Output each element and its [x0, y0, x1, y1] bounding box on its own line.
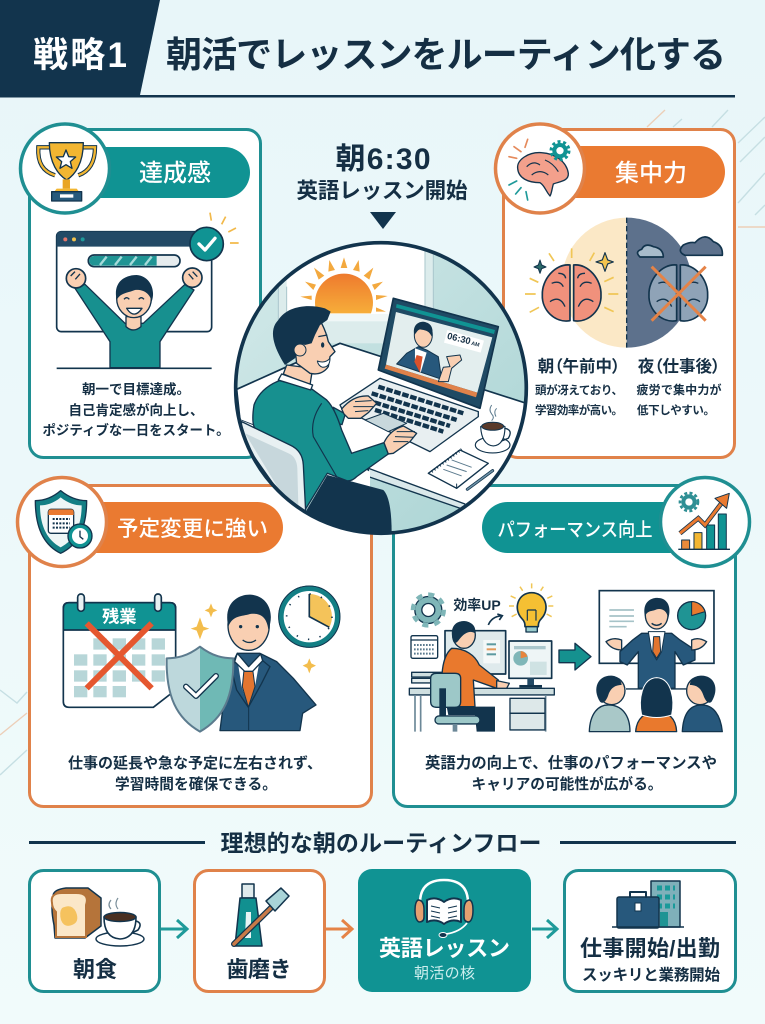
panel: 達成感 — [20, 124, 260, 458]
calendar: 残業 — [102, 606, 137, 626]
body text: night: 低下しやすい。 — [637, 403, 715, 417]
title: 朝活でレッスンをルーティン化する — [166, 34, 726, 75]
flow step: 朝食: 朝食 — [73, 957, 117, 982]
body text: morning: 学習効率が高い。 — [535, 403, 623, 417]
notebook and pen — [428, 449, 493, 489]
icon: growth chart badge — [660, 478, 750, 566]
pill heading: 達成感 — [60, 147, 250, 198]
body text: 自己肯定感が向上し、 — [68, 402, 204, 418]
laptop — [340, 298, 498, 452]
icon: shield calendar badge — [18, 478, 106, 566]
illustration: calendar with cross, businessman and shield — [63, 586, 340, 732]
flow step: 仕事開始/出勤: スッキリと業務開始 — [582, 966, 720, 984]
body text: morning — [535, 356, 623, 417]
chair — [240, 422, 306, 512]
icon: trophy badge — [20, 124, 110, 213]
pill heading: パフォーマンス向上: パフォーマンス向上 — [498, 519, 652, 541]
time callout — [296, 143, 468, 229]
arrow: step 1 to 2 — [161, 920, 187, 938]
icon: headset and book — [415, 880, 473, 938]
body text: キャリアの可能性が広がる。 — [472, 775, 662, 793]
icon: toothpaste and brush — [234, 884, 289, 946]
flow step: 英語レッスン — [358, 869, 531, 992]
flow step: 英語レッスン: 英語レッスン — [379, 936, 510, 961]
body text: night: 夜（仕事後） — [638, 356, 720, 376]
arrow: step 3 to 4 — [532, 920, 557, 938]
time callout: 朝6:30 — [336, 143, 430, 176]
body text: night: 疲労で集中力が — [636, 382, 722, 397]
flow section heading: 理想的な朝のルーティンフロー — [220, 830, 542, 856]
laptop: 06:30 AM — [446, 331, 482, 349]
audience — [589, 676, 722, 732]
body text — [42, 381, 230, 438]
icon: toast and coffee — [52, 888, 144, 946]
pill heading: 予定変更に強い — [70, 502, 283, 553]
desk — [237, 343, 528, 510]
flow step: 歯磨き: 歯磨き — [226, 957, 292, 982]
body text: morning: 頭が冴えており、 — [535, 383, 623, 397]
panel: 集中力 — [496, 124, 734, 458]
body text: night — [636, 356, 722, 417]
central illustration: morning English lesson — [236, 237, 528, 533]
pill heading: 達成感: 達成感 — [139, 159, 211, 187]
worker — [431, 621, 509, 732]
presentation board — [599, 591, 714, 663]
body text: ポジティブな一日をスタート。 — [42, 422, 230, 438]
icon: briefcase and building — [612, 881, 684, 928]
window and sun — [278, 237, 433, 343]
body text: morning: 朝（午前中） — [538, 356, 620, 376]
clock — [279, 586, 340, 647]
pill heading: 予定変更に強い: 予定変更に強い — [117, 517, 268, 541]
illustration: worker efficiency to presentation: 効率UP — [453, 597, 501, 613]
flow section heading — [29, 830, 736, 856]
gear — [413, 595, 444, 625]
pill heading: 集中力 — [550, 146, 725, 198]
panel: パフォーマンス向上 — [394, 478, 750, 806]
sparkles — [191, 603, 316, 673]
desk and monitors — [409, 631, 554, 732]
body text: 学習時間を確保できる。 — [115, 775, 277, 793]
body text — [425, 753, 717, 793]
time callout: 英語レッスン開始 — [296, 179, 468, 203]
flow step: 仕事開始/出勤: 仕事開始/出勤 — [580, 936, 720, 961]
body text: 英語力の向上で、仕事のパフォーマンスや — [425, 753, 717, 772]
body text: 朝一で目標達成。 — [82, 381, 190, 397]
pill heading: パフォーマンス向上 — [482, 502, 704, 553]
body text: 仕事の延長や急な予定に左右されず、 — [68, 754, 322, 772]
arrow: step 2 to 3 — [326, 920, 352, 938]
icon: brain badge — [496, 124, 584, 213]
pill heading: 集中力: 集中力 — [615, 160, 687, 187]
header band — [0, 0, 735, 98]
illustration: worker efficiency to presentation — [409, 583, 722, 732]
panel: 予定変更に強い — [18, 478, 372, 806]
calendar — [63, 594, 176, 707]
title tag: 戦略1: 戦略1 — [33, 36, 127, 75]
title tag: 戦略1 — [0, 0, 160, 95]
body text — [68, 754, 322, 793]
shield with check — [167, 647, 233, 732]
person with teal sweater — [253, 306, 417, 533]
comparison illustration: morning vs night brain — [525, 218, 722, 348]
businessman — [220, 595, 316, 731]
flow step: 朝食 — [30, 870, 160, 992]
presenter — [606, 598, 707, 688]
illustration: cheering person and progress window — [57, 213, 239, 368]
flow step: 英語レッスン: 朝活の核 — [414, 965, 475, 982]
calendar icon — [411, 636, 438, 658]
light bulb — [509, 583, 553, 632]
coffee cup — [475, 405, 510, 453]
arrow: down triangle — [370, 212, 396, 229]
flow step: 仕事開始/出勤 — [564, 870, 736, 992]
flow step: 歯磨き — [194, 870, 324, 992]
arrow: to presentation — [559, 643, 591, 670]
